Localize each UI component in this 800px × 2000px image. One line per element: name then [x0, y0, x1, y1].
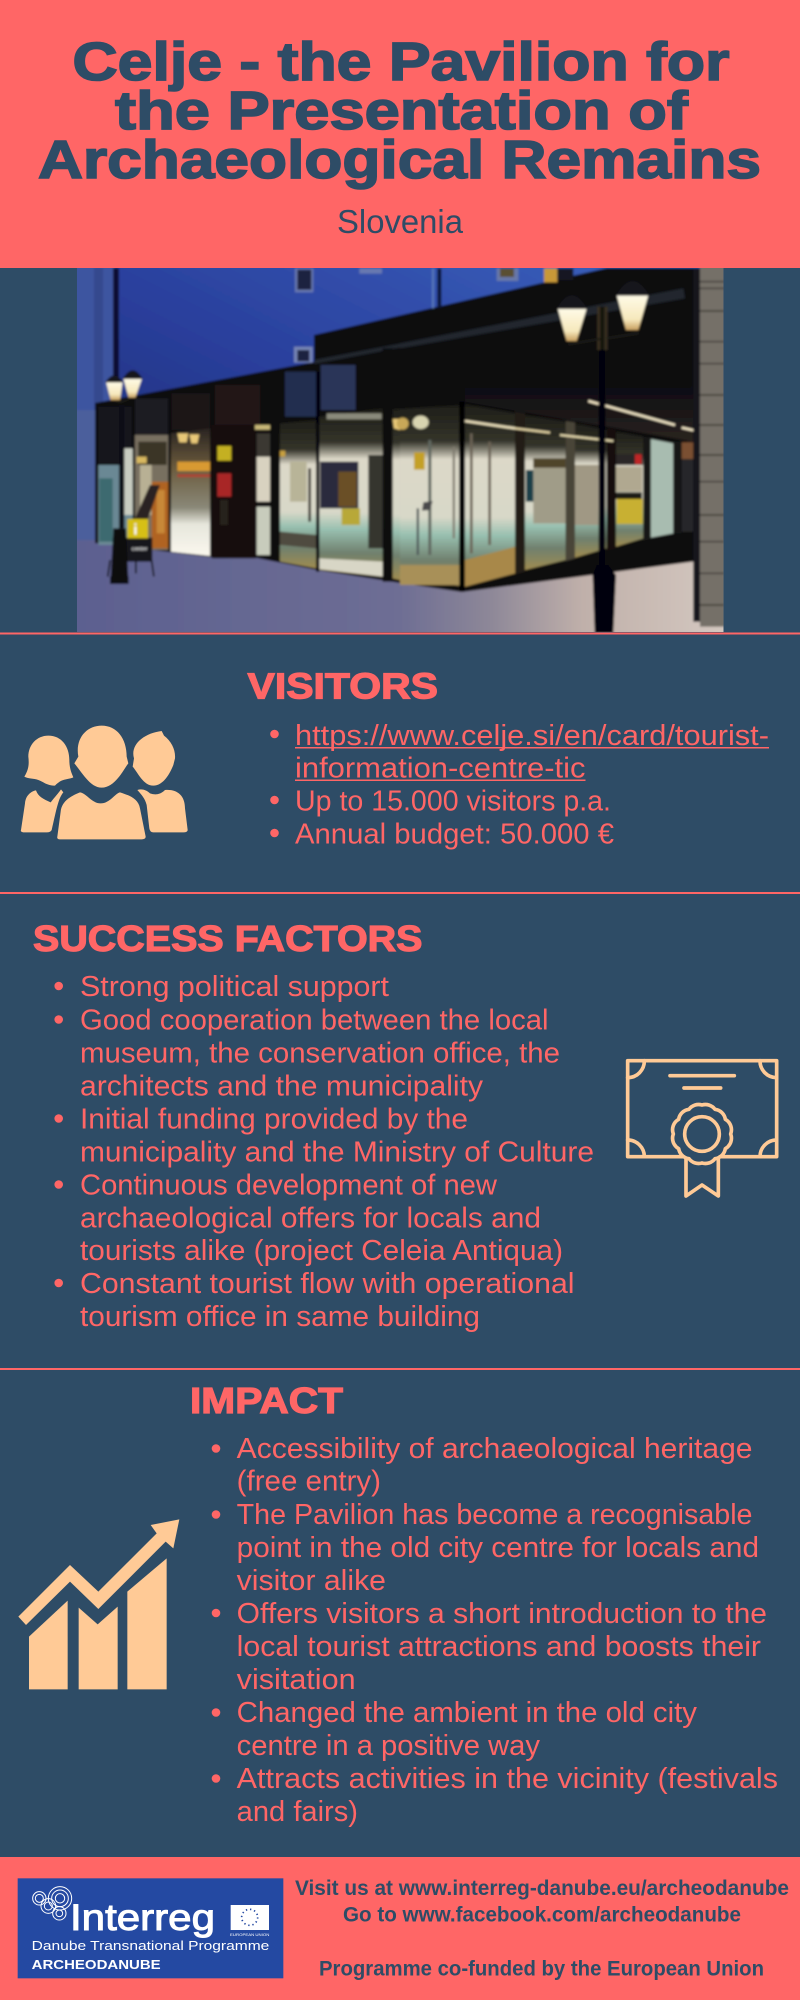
logo: Interreg: ARCHEODANUBE: [32, 1958, 161, 1972]
icon: three people: [21, 726, 188, 839]
logo: Interreg: Danube Transnational Programme: [32, 1938, 269, 1953]
list: impact: visitor alike: [237, 1565, 386, 1597]
list: success factors: architects and the municipality: [80, 1070, 484, 1102]
list: success factors: municipality and the Ministry of Culture: [80, 1136, 594, 1168]
list: impact: (free entry): [237, 1466, 381, 1498]
photo: pavilion at dusk: i: [133, 522, 137, 538]
list: impact: Offers visitors a short introduction to the: [237, 1598, 767, 1630]
logo: Interreg: Interreg: [70, 1896, 215, 1938]
list: impact: centre in a positive way: [237, 1730, 541, 1762]
panel: visitors: [0, 632, 800, 850]
text: contact and funding: Programme co-funded by the European Union: [319, 1958, 764, 1980]
title: the Presentation of: [115, 81, 689, 141]
list: success factors: Constant tourist flow with operational: [80, 1268, 574, 1300]
panel: impact: [0, 1368, 800, 1828]
list: impact: visitation: [237, 1664, 356, 1696]
panel: footer: [0, 1857, 800, 2000]
list: visitor facts: Annual budget: 50.000 €: [295, 818, 614, 850]
list: impact: The Pavilion has become a recognisable: [237, 1499, 752, 1531]
text: contact and funding: Go to www.facebook.com/archeodanube: [343, 1904, 741, 1926]
list: impact: point in the old city centre for locals and: [237, 1532, 759, 1564]
list: impact: Accessibility of archaeological heritage: [237, 1433, 752, 1465]
photo: pavilion at dusk: [75, 265, 726, 634]
list: impact: [212, 1433, 778, 1828]
list: success factors: tourism office in same building: [80, 1301, 480, 1333]
chart icon: rising bars and arrow: [18, 1519, 179, 1689]
logo: Interreg: [18, 1878, 283, 1978]
logo: Interreg: EUROPEAN UNION: [230, 1932, 269, 1937]
list: impact: Changed the ambient in the old city: [237, 1697, 698, 1729]
list: impact: local tourist attractions and boosts their: [237, 1631, 762, 1663]
panel: success factors: [0, 892, 800, 1333]
list: impact: Attracts activities in the vicinity (festivals: [237, 1763, 778, 1795]
text: contact and funding: [295, 1877, 789, 1980]
panel: header: [0, 0, 800, 268]
heading: impact: IMPACT: [190, 1380, 343, 1421]
heading: visitors: VISITORS: [248, 666, 438, 706]
list: success factors: archaeological offers for locals and: [80, 1202, 541, 1234]
list: success factors: Good cooperation between the local: [80, 1004, 548, 1036]
list: visitor facts: https://www.celje.si/en/card/tourist-: [295, 720, 769, 752]
list: success factors: Strong political support: [80, 971, 389, 1003]
title: Celje - the Pavilion for: [72, 32, 730, 92]
list: success factors: Continuous development of new: [80, 1170, 497, 1202]
subtitle: country: Slovenia: [337, 203, 464, 240]
icon: certificate: [628, 1061, 777, 1196]
list: visitor facts: Up to 15.000 visitors p.a.: [295, 786, 611, 818]
list: success factors: museum, the conservation office, the: [80, 1038, 560, 1070]
list: success factors: Initial funding provided by the: [80, 1104, 468, 1136]
title: Archaeological Remains: [38, 130, 761, 190]
heading: success factors: SUCCESS FACTORS: [33, 918, 422, 959]
list: visitor facts: information-centre-tic: [295, 752, 586, 784]
list: visitor facts: [270, 720, 769, 850]
title: [38, 32, 761, 190]
list: success factors: [54, 971, 594, 1333]
list: success factors: tourists alike (project Celeia Antiqua): [80, 1235, 563, 1267]
text: contact and funding: Visit us at www.interreg-danube.eu/archeodanube: [295, 1877, 789, 1900]
photo: pavilion at dusk: center: [132, 546, 148, 552]
list: impact: and fairs): [237, 1796, 358, 1828]
